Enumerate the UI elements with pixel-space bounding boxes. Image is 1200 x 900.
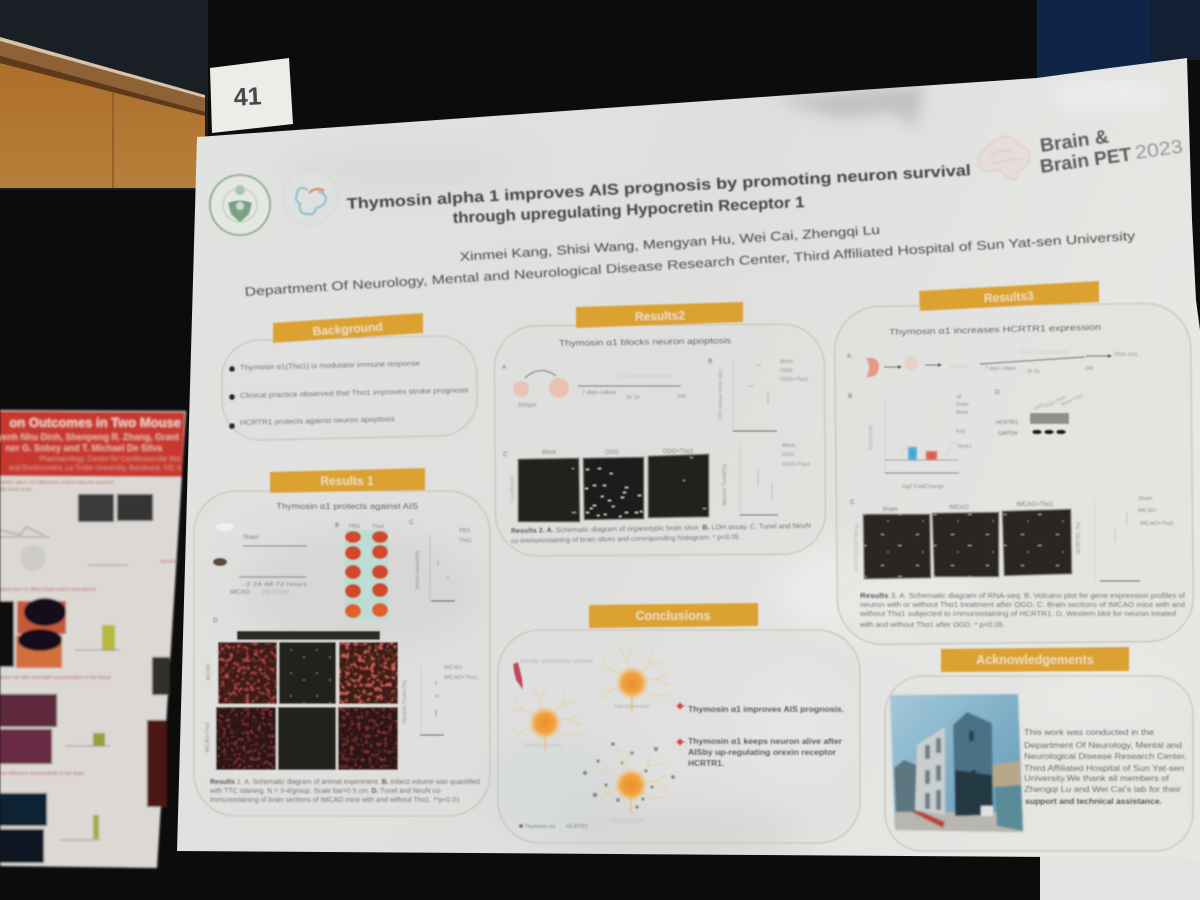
chart: LDH assay: OGD+Thα1 [780, 377, 808, 383]
chart: volcano plot: -log10(padj) [868, 424, 874, 451]
figure: HCRTR1 immunostaining: C [850, 499, 855, 506]
figure: HCRTR1 immunostaining: HCRTR1/DAPI/Merge [854, 522, 860, 571]
heading: results 3: Results3 [983, 289, 1034, 305]
heading: results 1 [270, 468, 425, 493]
diagram: animal experiment timeline [213, 523, 307, 596]
chart: HCRTR1 expression: HCRTR1 (%) [1076, 522, 1082, 554]
figure: HCRTR1 immunostaining: tMCAO [949, 505, 969, 511]
affiliation: Department Of Neurology, Mental and Neurological Disease Research Center, Third Affiliated Hospital of Sun Yat-sen University [244, 229, 1136, 299]
subheading: results 2: Thymosin α1 blocks neuron apoptosis [559, 335, 731, 348]
logo: Brain and Brain PET 2023: Brain PET [1039, 144, 1133, 178]
diagram: brain slice culture timeline [502, 364, 686, 409]
caption: results 3: neuron with or without Thα1 treatment after OGD. C. Brain sections of tMCAO mice with and [860, 602, 1185, 609]
logo: hospital mark [283, 171, 337, 225]
paper sheet [177, 58, 1200, 858]
neighbouring poster header [0, 411, 185, 477]
icon: injured neuron: Injured neuron [614, 704, 650, 710]
figure: immunostaining grid: D [213, 617, 218, 624]
acknowledgement text: Zhengqi Lu and Wei Cai's lab for their [1024, 785, 1181, 794]
diagram: brain slice culture timeline: OGD Reperfusion [619, 373, 671, 380]
neighbouring poster red subheads [0, 480, 178, 777]
caption: results 1: immunostaining of brain sections of tMCAO mice with and without Thα1. **p<0.01 [210, 797, 460, 804]
chart: volcano plot: None [956, 410, 968, 416]
acknowledgement text: Department Of Neurology, Mental and [1024, 741, 1182, 750]
caption: results 2: co-immunostaining of brain slices and corresponding histogram. * p<0.05 [511, 534, 739, 545]
chart: infarct volume: PBS [459, 528, 470, 534]
acknowledgement text: This work was conducted in the [1024, 728, 1154, 737]
chart: neuron counts: tMCAO [444, 665, 463, 671]
conclusion points: AISby up-regulating orexin receptor [688, 748, 837, 757]
heading: acknowledgements [941, 647, 1129, 672]
figure: western blot: Mock+Thα1 [1060, 392, 1084, 407]
chart: HCRTR1 expression: tMCAO+Thα1 [1140, 521, 1174, 527]
neighbouring poster at left [0, 410, 186, 868]
diagram: brain slice culture timeline: 500μm [518, 403, 536, 409]
acknowledgement text: support and technical assistance. [1025, 797, 1162, 806]
diagram: brain slice culture timeline: 7 days culture [582, 390, 616, 396]
figure: TTC brain slices: Thα1 [372, 524, 385, 530]
heading: results 2 [576, 302, 743, 328]
figure: immunostaining grid: tMCAO+Thα1 [205, 721, 211, 752]
heading: results 3 [919, 281, 1099, 311]
icon: lightning with stroke label [513, 659, 594, 690]
neighbouring poster red subheads: stroke alters LVI influences infarct-induced neuroinf. [0, 480, 115, 486]
caption: results 3: without Thα1 subjected to immunostaining of HCRTR1. D. Western blot for neuron treated [859, 611, 1176, 618]
chart: neuron tunel percent: OGD+Thα1 [782, 462, 810, 468]
chart: neuron tunel percent [722, 443, 810, 515]
chart: infarct volume: Infarct volume(%) [415, 550, 421, 590]
chart: volcano plot: FoG [956, 429, 966, 435]
diagram: animal experiment timeline: Sham [243, 535, 259, 541]
neighbouring poster red subheads: Survival [160, 559, 178, 565]
chart: infarct volume: Thα1 [459, 538, 472, 544]
chart: infarct volume: C [409, 519, 414, 526]
figure: TTC brain slices [335, 522, 388, 620]
title [346, 162, 971, 227]
chart: infarct volume [409, 519, 472, 601]
figure: immunostaining grid: tMCAO [206, 664, 212, 680]
figure: tunel images [503, 449, 709, 522]
acknowledgement text [1024, 728, 1187, 806]
legend: thymosin and receptor: Thymosin α1 [524, 824, 556, 830]
heading: conclusions: Conclusions [635, 609, 711, 623]
chart: neuron tunel percent: OGD [782, 452, 795, 458]
chart: LDH assay: Mock [780, 359, 793, 365]
panel: conclusions [498, 603, 860, 843]
logo: Brain and Brain PET 2023: Brain & [1039, 127, 1110, 157]
figure: western blot: GAPDH [998, 431, 1018, 437]
caption: results 3: with and without Thα1 after OGD. * p<0.05. [859, 622, 1005, 629]
neighbouring poster red subheads: the brain in an [0, 487, 32, 493]
neighbouring poster header: on Outcomes in Two Mouse [9, 415, 181, 430]
figure: tunel images: Tunel/NeuN [510, 476, 516, 503]
diagram: brain slice culture timeline: 2h 1h [626, 395, 640, 401]
neighbouring poster red subheads: not influence neurodeficits in the brain [0, 771, 84, 777]
legend: thymosin and receptor [519, 824, 588, 830]
chart: volcano plot: Down [956, 402, 969, 408]
conclusion points: HCRTR1. [688, 759, 724, 768]
figure: tunel images: OGD+Thα1 [663, 449, 694, 455]
title: Thymosin alpha 1 improves AIS prognosis by promoting neuron survival [346, 162, 971, 213]
authors: Xinmei Kang, Shisi Wang, Mengyan Hu, Wei Cai, Zhengqi Lu [459, 223, 880, 264]
heading: background [273, 313, 423, 343]
heading: background: Background [312, 320, 383, 338]
caption: results 1 [209, 779, 480, 804]
logo: Brain and Brain PET 2023 [978, 127, 1184, 180]
title: through upregulating Hypocretin Receptor 1 [452, 194, 805, 227]
acknowledgement text: Third Affiliated Hospital of Sun Yat-sen [1024, 764, 1185, 773]
chart: volcano plot: up [956, 394, 962, 400]
diagram: RNA-seq workflow: 2h 1h [1027, 369, 1040, 375]
figure: tunel images: C [503, 451, 508, 458]
logo: Brain and Brain PET 2023: 2023 [1134, 136, 1184, 164]
neighbouring poster header: ner G. Sobey and T. Michael De Silva [5, 443, 163, 453]
panel: results 2 [494, 302, 826, 556]
neighbouring poster header: and Environment, La Trobe University, Bundoora, VIC 3 [9, 465, 181, 472]
paper shading [240, 79, 1170, 855]
caption: results 3: Results 3. A. Schematic diagram of RNA-seq. B. Volcano plot for gene expression profiles of [860, 593, 1185, 600]
heading: acknowledgements: Acknowledgements [976, 653, 1094, 667]
background bullets: Clinical practice observed that Thα1 improves stroke prognosis [240, 385, 469, 400]
figure: western blot: OGD [1033, 402, 1045, 411]
icon: injured neuron [598, 645, 668, 711]
chart: HCRTR1 expression [1076, 496, 1174, 581]
chart: LDH assay: LDH release (fold ratio) [718, 369, 724, 421]
conclusion points [677, 703, 844, 768]
conclusion points: Thymosin α1 improves AIS prognosis. [688, 705, 844, 714]
chart: neuron tunel percent: Mock [782, 443, 795, 449]
diagram: RNA-seq workflow: OGD Reperfusion [1020, 350, 1068, 356]
neighbouring poster red subheads: ment mice to affect brain infarct and edema [0, 587, 96, 593]
conclusion points: Thymosin α1 keeps neuron alive after [688, 737, 843, 746]
icon: living neuron with receptors [583, 742, 675, 824]
acknowledgement text: Neurological Disease Research Center, [1024, 752, 1187, 761]
icon: healthy neuron: Healthy neuron [524, 743, 562, 749]
logo: university seal [210, 175, 270, 235]
legend: thymosin and receptor: HCRTR1 [566, 824, 588, 830]
figure: western blot: D [995, 389, 1000, 396]
diagram: animal experiment timeline: tMCAO [230, 590, 250, 596]
chart: neuron counts: Neuron Tunel (%) [402, 680, 408, 724]
background bullets: Thymosin α1(Thα1) is modulator immune response [240, 359, 420, 372]
chart: neuron counts: tMCAO+Thα1 [444, 675, 478, 681]
diagram: animal experiment timeline: PBS/Thα1 [262, 590, 290, 596]
figure: TTC brain slices: PBS [349, 524, 360, 530]
subheading: results 3: Thymosin α1 increases HCRTR1 expression [889, 322, 1101, 337]
chart: LDH assay [708, 358, 808, 432]
icon: lightning with stroke label: Acute ischemic stroke [520, 659, 594, 665]
figure: western blot [995, 389, 1084, 437]
panel: background [221, 313, 478, 441]
diagram: RNA-seq workflow [847, 350, 1137, 377]
caption: results 2: Results 2. A. Schematic diagram of organotypic brain slice. B. LDH assay. C. Tunel and NeuN [511, 523, 811, 535]
background bullets [229, 359, 469, 429]
diagram: RNA-seq workflow: neuron [950, 364, 967, 370]
number tag 41 [210, 58, 293, 133]
chart: neuron counts [402, 665, 478, 736]
icon: living neuron with receptors: Living neuron [610, 818, 644, 824]
chart: volcano plot: Hcrtr1 [958, 444, 972, 450]
figure: HCRTR1 immunostaining: tMCAO+Thα1 [1017, 502, 1054, 508]
caption: results 1: Results 1. A. Schematic diagram of animal experiment. B. Infarct volume was quantified [210, 779, 480, 786]
chart: volcano plot: B [848, 393, 852, 400]
chart: LDH assay: B [708, 358, 712, 365]
diagram: RNA-seq workflow: RNA-Seq [1114, 352, 1137, 358]
neighbouring poster figures [0, 494, 170, 863]
heading: results 1: Results 1 [320, 474, 374, 488]
neighbouring poster header: Pharmacology, Centre for Cardiovascular Biol [40, 456, 181, 463]
diagram: RNA-seq workflow: 7 days culture [985, 366, 1016, 372]
chart: volcano plot: log2 FoldChange [902, 484, 944, 490]
figure: western blot: OGD+Thα1 [1043, 394, 1067, 409]
figure: immunostaining grid [205, 617, 400, 772]
diagram: brain slice culture timeline: 24h [677, 394, 686, 400]
panel: acknowledgements [885, 647, 1193, 851]
figure: TTC brain slices: B [335, 522, 339, 529]
panel: results 3 [834, 281, 1194, 645]
chart: HCRTR1 expression: Sham [1138, 496, 1153, 502]
subheading: results 1: Thymosin α1 protects against AIS [276, 501, 418, 511]
neighbouring poster red subheads: does not alter overnight accumulation in the tissue [0, 675, 111, 681]
photo: hospital building [890, 694, 1023, 832]
chart: volcano plot [848, 393, 972, 490]
chart: neuron tunel percent: Neuron Tunel(%) [722, 464, 728, 506]
figure: tunel images: Mock [542, 450, 557, 456]
chart: HCRTR1 expression: tMCAO [1138, 508, 1157, 514]
diagram: animal experiment timeline: -3 24 48 72 hours [243, 582, 307, 588]
panel: results 1 [194, 468, 490, 816]
wooden wall panel [0, 37, 205, 188]
diagram: brain slice culture timeline: A [502, 364, 507, 371]
icon: healthy neuron [511, 685, 581, 751]
main poster [177, 58, 1200, 858]
chart: LDH assay: OGD [780, 368, 793, 374]
caption: results 3 [859, 593, 1185, 629]
acknowledgement text: University.We thank all members of [1024, 774, 1170, 783]
figure: HCRTR1 immunostaining: Sham [882, 507, 898, 513]
caption: results 2 [511, 523, 811, 545]
figure: western blot: HCRTR1 [996, 420, 1018, 426]
background bullets: HCRTR1 protects against neuron apoptosis [240, 414, 395, 427]
diagram: RNA-seq workflow: 24h [1085, 366, 1094, 372]
heading: results 2: Results2 [635, 308, 685, 324]
heading: conclusions [589, 603, 758, 628]
number tag 41: 41 [233, 82, 262, 112]
figure: tunel images: OGD [605, 450, 619, 456]
figure: HCRTR1 immunostaining [850, 499, 1072, 579]
caption: results 1: with TTC staining. N = 3-4/group. Scale bar=0.5 cm. D. Tunel and NeuN co- [209, 788, 443, 795]
diagram: RNA-seq workflow: A [847, 353, 852, 360]
